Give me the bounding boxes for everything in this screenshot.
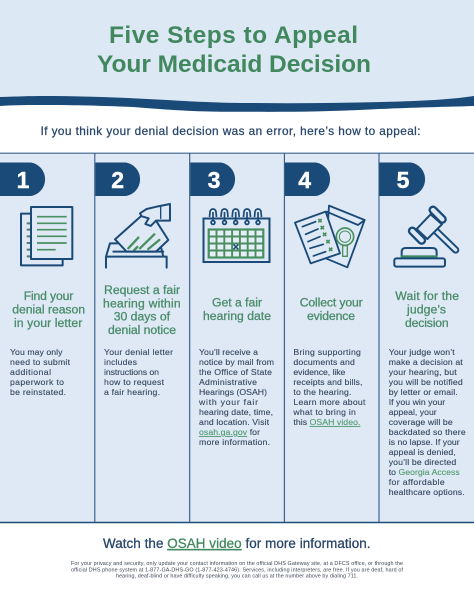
number tab 2 — [95, 162, 140, 196]
body text 5: you’ll be directed — [389, 457, 456, 467]
body text 5: you will be notified — [389, 377, 463, 387]
heading 1: in your letter — [14, 316, 82, 330]
body text 5: If you win your — [389, 397, 445, 407]
heading 5: judge’s — [406, 302, 446, 316]
footer disclaimer — [71, 561, 404, 580]
body text 3: and location. Visit — [199, 417, 270, 427]
icon: calendar — [204, 209, 270, 262]
number tab 4: 4 — [298, 167, 311, 193]
number tab 2: 2 — [111, 167, 124, 193]
body text 3: the Office of State — [199, 367, 272, 377]
heading 5: decision — [405, 316, 449, 330]
heading 2: Request a fair — [104, 283, 180, 297]
body text 3: osah.ga.gov for — [199, 427, 260, 437]
title: Your Medicaid Decision — [97, 51, 371, 78]
body text 4: what to bring in — [292, 407, 356, 417]
step 5 — [380, 162, 466, 497]
heading 2: denial notice — [108, 323, 176, 337]
heading 4 — [300, 296, 363, 323]
body text 4: Learn more about — [293, 397, 366, 407]
heading 2: 30 days of — [114, 310, 171, 324]
body text 5: your hearing, but — [389, 367, 457, 377]
body text 3: notice by mail from — [199, 357, 274, 367]
body text 5: backdated so there — [389, 427, 466, 437]
number tab 3: 3 — [208, 167, 220, 193]
body text 1 — [10, 347, 71, 397]
footer disclaimer: official DHS phone system at 1-877-GA-DHS-GO (1-877-423-4746). Services, including interpreters, are free. If you are deaf, hard of — [71, 567, 404, 573]
body text 5: Your judge won’t — [389, 347, 455, 357]
body text 3: hearing date, time, — [199, 407, 273, 417]
body text 4: evidence, like — [293, 367, 346, 377]
step 1 — [0, 162, 85, 397]
footer disclaimer: For your privacy and security, only update your contact information on the official DHS Gateway site, at a DFCS office, or through the — [71, 561, 403, 567]
body text 4: to the hearing. — [293, 387, 351, 397]
heading 2: hearing within — [103, 296, 181, 310]
body text 1: paperwork to — [10, 377, 64, 387]
body text 5 — [389, 347, 466, 497]
body text 1: You may only — [10, 347, 63, 357]
heading 5 — [395, 289, 459, 330]
body text 4: documents and — [293, 357, 355, 367]
body text 2 — [104, 347, 173, 397]
number tab 1 — [0, 162, 45, 196]
icon: documents and magnifier — [295, 206, 365, 267]
title: Five Steps to Appeal — [109, 22, 358, 49]
body text 2: includes — [104, 357, 138, 367]
body text 2: how to request — [104, 377, 165, 387]
heading 3: Get a fair — [212, 296, 262, 310]
body text 1: additional — [10, 367, 51, 377]
number tab 3 — [190, 162, 235, 196]
heading 4: Collect your — [300, 296, 363, 310]
number tab 4 — [285, 162, 330, 196]
step 2 — [95, 162, 181, 397]
icon: documents — [21, 207, 72, 265]
footer disclaimer: hearing, deaf-blind or have difficulty speaking, you can call us at the number above by dialing 711. — [116, 574, 358, 580]
body text 4 — [292, 347, 366, 427]
body text 3: Administrative — [199, 377, 257, 387]
heading 1: denial reason — [12, 302, 85, 316]
number tab 5 — [380, 162, 425, 196]
body text 2: a fair hearing. — [104, 387, 160, 397]
body text 5: is no lapse. If your — [389, 437, 460, 447]
body text 5: make a decision at — [389, 357, 463, 367]
heading 4: evidence — [307, 309, 355, 323]
number tab 5: 5 — [397, 167, 410, 193]
heading 3: hearing date — [203, 309, 271, 323]
body text 4: receipts and bills, — [293, 377, 362, 387]
body text 5: by letter or email. — [389, 387, 458, 397]
body text 5: for affordable — [389, 477, 445, 487]
heading 3 — [203, 296, 271, 323]
body text 3: with your fair — [198, 397, 258, 407]
heading 1 — [12, 289, 85, 330]
body text 2: Your denial letter — [104, 347, 173, 357]
header banner — [0, 0, 474, 125]
icon: ballot box and hand — [106, 204, 170, 268]
steps panel — [0, 153, 474, 522]
body text 4: Bring supporting — [293, 347, 361, 357]
icon: gavel — [394, 210, 456, 267]
title — [97, 22, 371, 78]
body text 4: this OSAH video. — [293, 417, 360, 427]
body text 1: be reinstated. — [10, 387, 66, 397]
body text 5: appeal, your — [389, 407, 437, 417]
body text 5: healthcare options. — [389, 487, 465, 497]
heading 2 — [103, 283, 181, 337]
step 4 — [285, 162, 366, 427]
heading 5: Wait for the — [395, 289, 459, 303]
intro text: If you think your denial decision was an error, here’s how to appeal: — [40, 124, 420, 138]
body text 5: appeal is denied, — [389, 447, 456, 457]
body text 3 — [198, 347, 274, 447]
heading 1: Find your — [24, 289, 73, 303]
body text 3: Hearings (OSAH) — [199, 387, 267, 397]
body text 3: You’ll receive a — [199, 347, 258, 357]
step 3 — [190, 162, 274, 447]
body text 3: more information. — [199, 437, 270, 447]
body text 2: instructions on — [104, 367, 159, 377]
body text 1: need to submit — [10, 357, 71, 367]
number tab 1: 1 — [17, 167, 30, 193]
body text 5: coverage will be — [389, 417, 453, 427]
body text 5: to Georgia Access — [389, 467, 460, 477]
video call to action: Watch the OSAH video for more information. — [103, 536, 370, 551]
